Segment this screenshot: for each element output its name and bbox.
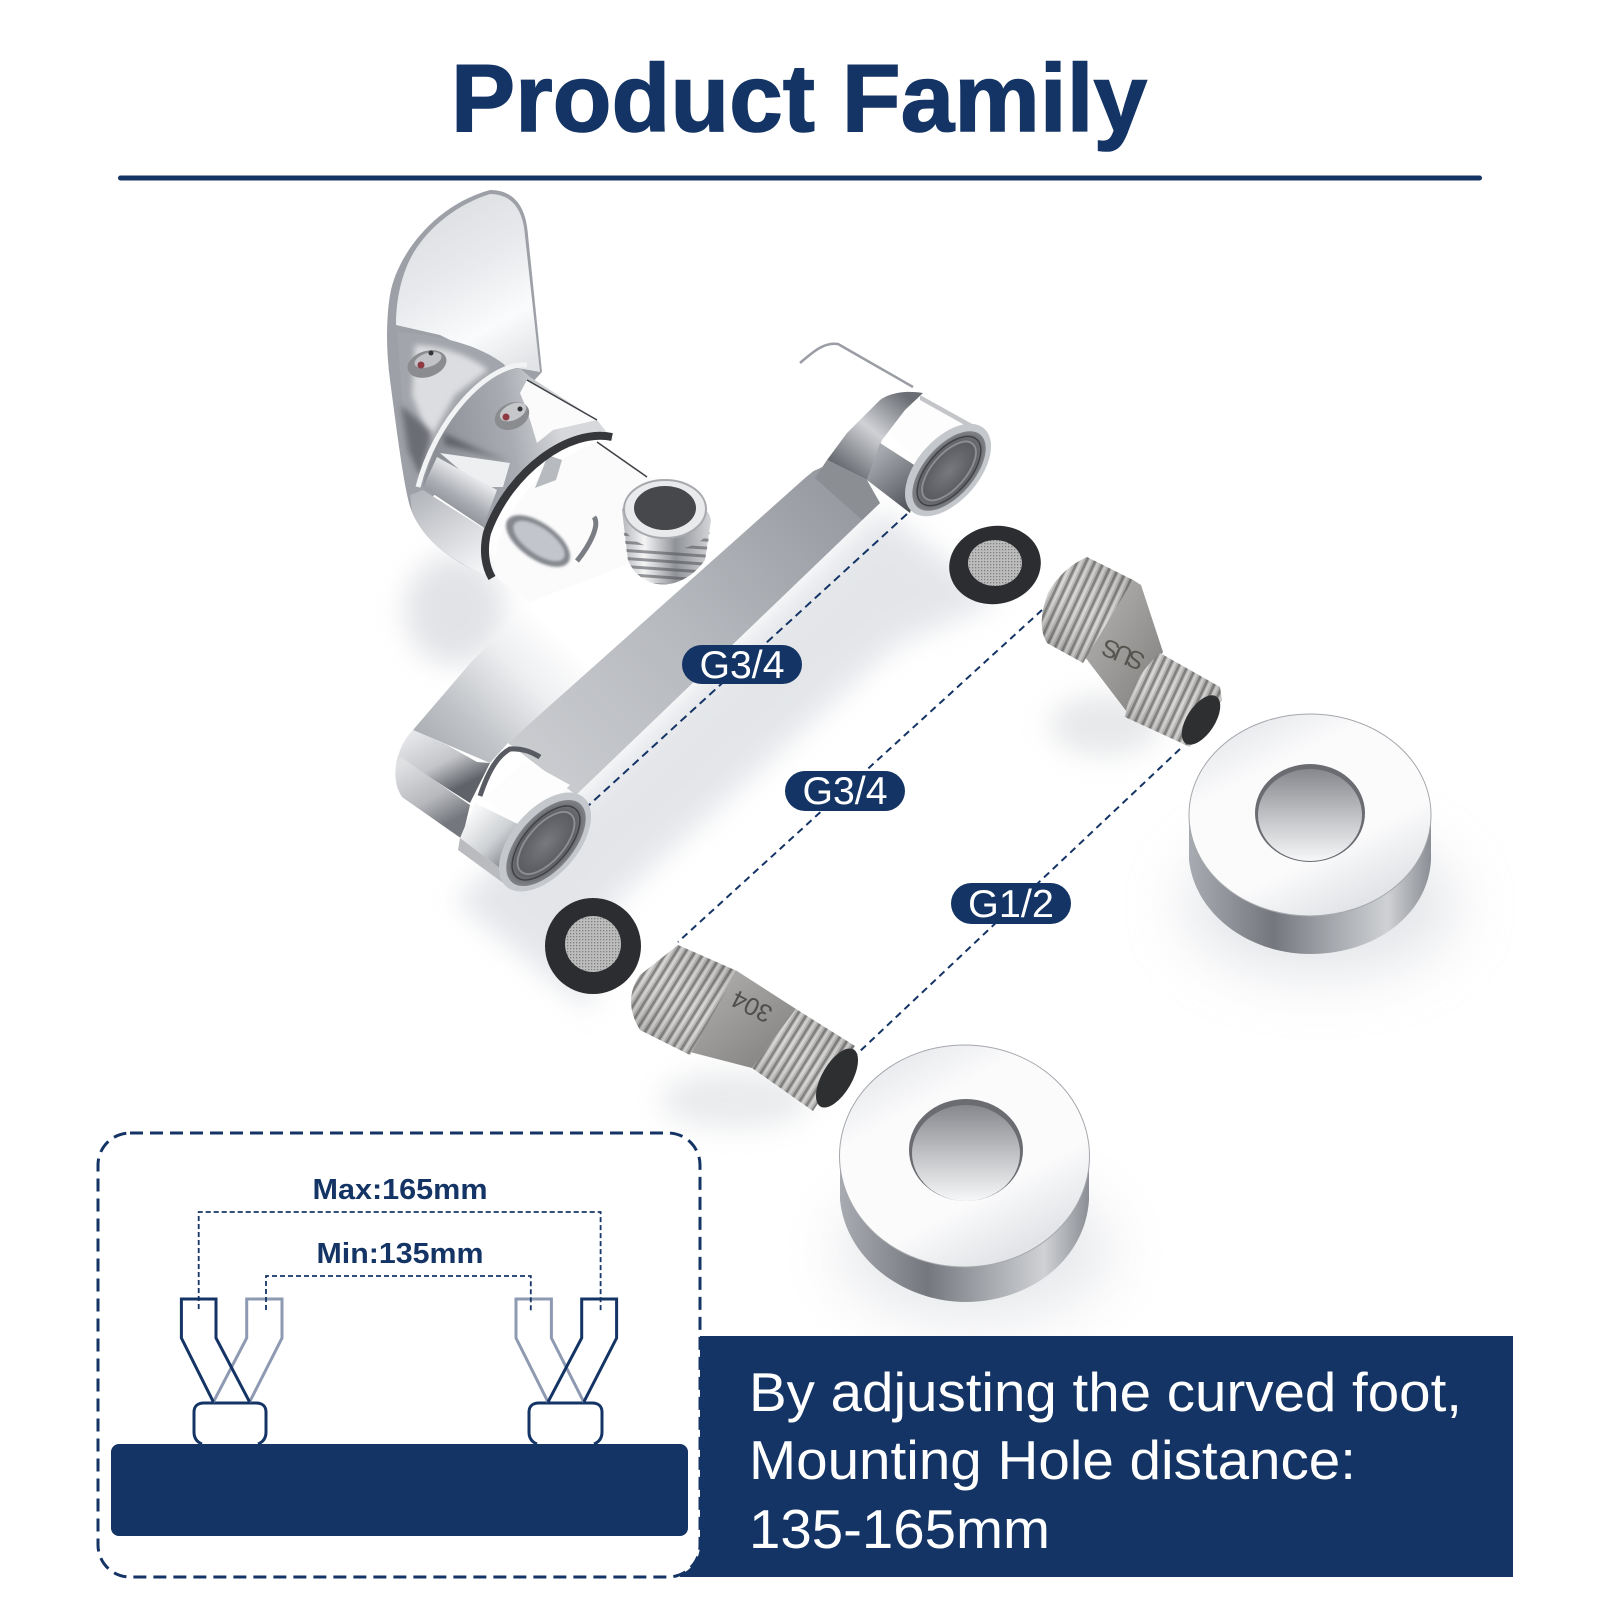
max label: Max:165mm bbox=[312, 1174, 488, 1206]
washer bottom bbox=[545, 898, 641, 994]
label pill: G1/2 bbox=[951, 883, 1071, 926]
main bar top face bbox=[413, 343, 913, 763]
right foot bbox=[529, 1403, 602, 1444]
inset dashed frame bbox=[98, 1133, 700, 1577]
faucet body bbox=[387, 190, 1007, 908]
right pipe: min position bbox=[516, 1299, 584, 1402]
main bar underside face bbox=[508, 465, 880, 795]
label pill: G1/2: G1/2 bbox=[968, 883, 1054, 926]
min dimension line bbox=[266, 1276, 531, 1311]
dashed line: G3/4 faucet inlet bbox=[576, 514, 907, 817]
info text: Mounting Hole distance: bbox=[749, 1430, 1356, 1491]
right pipe: max position bbox=[548, 1299, 617, 1402]
bar top edge bbox=[800, 344, 913, 387]
handle ring upper bbox=[418, 365, 527, 487]
title divider bbox=[118, 176, 1482, 180]
fitting stamp: SUS: SUS bbox=[1098, 633, 1149, 676]
info text bbox=[749, 1362, 1462, 1560]
handle cylinder section 2 bbox=[495, 442, 672, 602]
left foot bbox=[194, 1403, 266, 1444]
left pipe: min position bbox=[213, 1299, 282, 1402]
plate screw bbox=[404, 345, 450, 383]
label pill: G3/4 lower bbox=[785, 770, 905, 813]
handle cylinder section 1 bbox=[423, 368, 613, 533]
info panel bbox=[680, 1336, 1513, 1577]
dashed line: G3/4 fitting bbox=[678, 610, 1042, 942]
info text: By adjusting the curved foot, bbox=[749, 1362, 1462, 1423]
male outlet bbox=[622, 480, 711, 584]
label pill: G3/4 lower: G3/4 bbox=[802, 770, 888, 813]
fitting stamp: 304: 304 bbox=[727, 984, 777, 1028]
lower bar end cap bbox=[395, 730, 490, 839]
max dimension line bbox=[199, 1212, 601, 1311]
flange: bottom bbox=[840, 1045, 1090, 1302]
label pill: G3/4 upper bbox=[682, 644, 802, 687]
handle ring lower bbox=[485, 436, 612, 578]
fitting: SUS bbox=[1042, 557, 1228, 751]
title: Product Family bbox=[451, 45, 1147, 152]
washer top bbox=[943, 519, 1047, 611]
flange: right bbox=[1189, 714, 1431, 954]
inset: mounting distance diagram bbox=[98, 1133, 700, 1577]
left pipe: max position bbox=[181, 1299, 250, 1402]
upper nut bbox=[815, 392, 1007, 532]
label pill: G3/4 upper: G3/4 bbox=[700, 644, 784, 687]
info text: 135-165mm bbox=[749, 1499, 1050, 1560]
lower nut bbox=[458, 749, 609, 908]
wall bar bbox=[111, 1444, 688, 1536]
handle screw bbox=[490, 397, 534, 435]
min label: Min:135mm bbox=[316, 1238, 484, 1270]
wall plate bbox=[387, 190, 542, 578]
soft floor shadows bbox=[405, 510, 1455, 1320]
fitting: 304 bbox=[631, 945, 866, 1114]
dashed line: G1/2 fitting bbox=[857, 749, 1180, 1054]
